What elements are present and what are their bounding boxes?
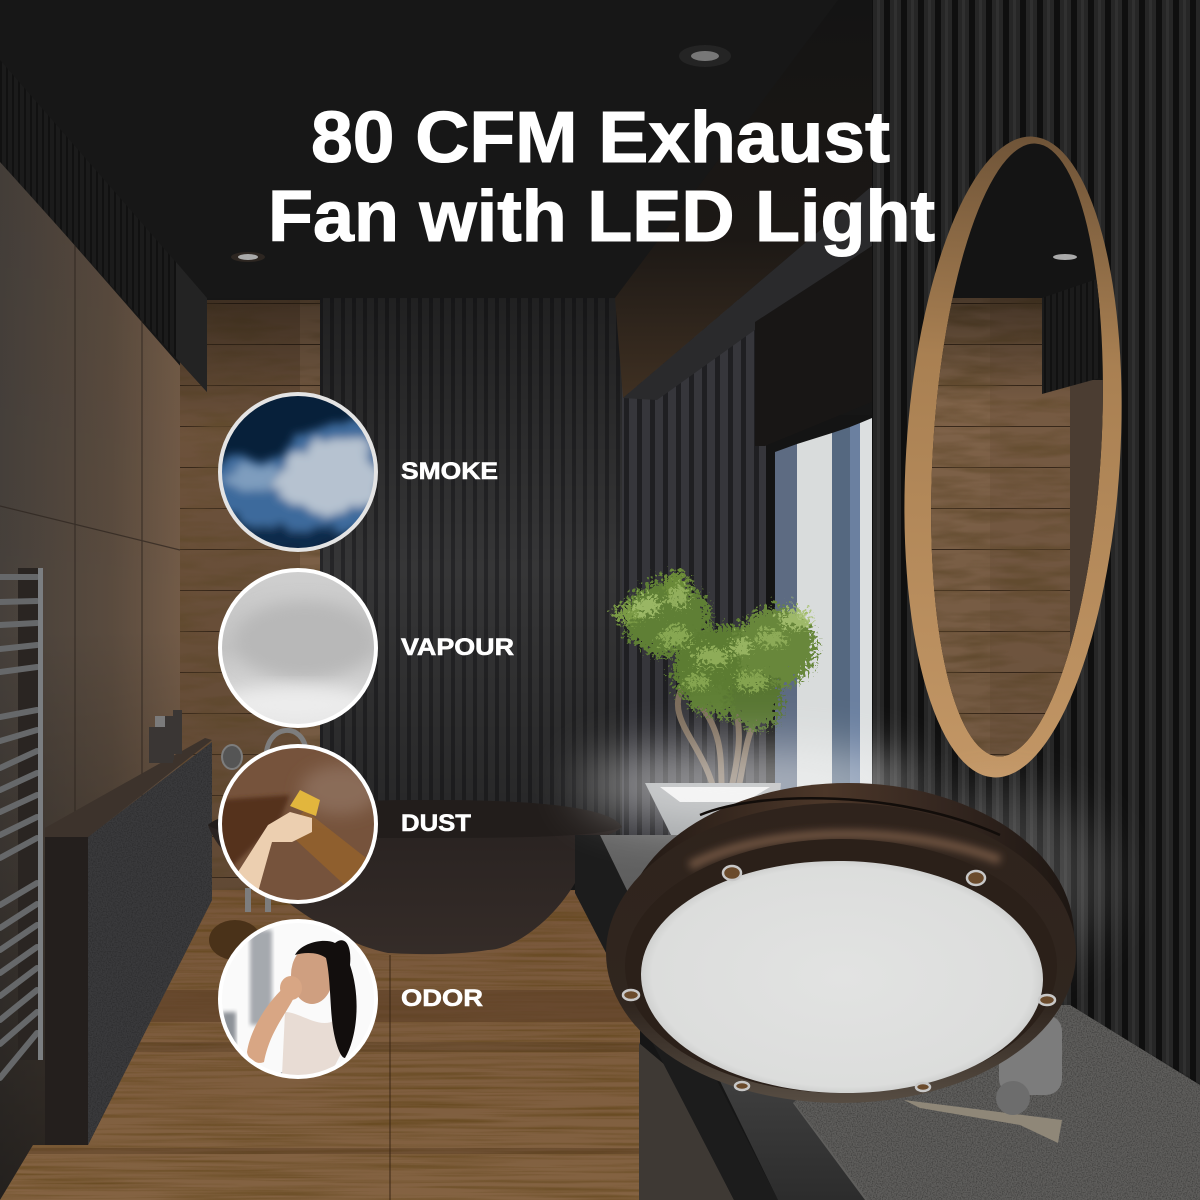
fan inner ring — [625, 839, 1057, 1093]
fan lens — [639, 858, 1045, 1096]
label: vapour: VAPOUR — [401, 634, 514, 661]
counter black edge — [575, 835, 778, 1200]
right counter — [575, 835, 1200, 1200]
counter base — [639, 1043, 734, 1200]
counter gray band — [600, 835, 865, 1200]
label: smoke: SMOKE — [401, 458, 498, 485]
item: vapour — [218, 568, 514, 728]
copper highlight — [690, 834, 1000, 866]
bottles — [149, 710, 182, 763]
beam stone strip — [623, 186, 872, 400]
plant pot — [645, 783, 781, 835]
icon: smoke circle — [210, 392, 385, 552]
title: 80 CFM Exhaust — [311, 98, 890, 178]
center ribbed wall — [320, 298, 625, 838]
icon: vapour circle — [218, 568, 378, 728]
icon: odor circle — [218, 920, 378, 1080]
right ribbed return wall — [622, 300, 772, 840]
ceiling — [0, 0, 838, 298]
mirror — [904, 136, 1122, 778]
floor — [0, 885, 650, 1200]
mirror reflection — [931, 144, 1103, 756]
left counter top — [45, 738, 212, 837]
left counter side — [88, 742, 212, 1145]
fan housing ring — [606, 803, 1076, 1103]
faucet and shower — [222, 730, 306, 912]
item: smoke — [210, 392, 498, 552]
window — [766, 415, 874, 815]
right ribbed wall — [872, 0, 1200, 1085]
left counter — [45, 738, 212, 1145]
ceiling beam — [615, 0, 872, 398]
light haze around fan — [580, 749, 1110, 970]
bathtub — [208, 800, 622, 954]
left soffit — [0, 60, 207, 392]
item: odor — [218, 920, 483, 1080]
mirror frame — [887, 130, 1139, 784]
item: dust — [218, 744, 471, 904]
left counter end — [45, 837, 88, 1145]
fan back cap — [622, 783, 1074, 1087]
ceiling downlights — [231, 45, 731, 262]
fan screws — [623, 866, 1055, 1091]
wood back wall — [180, 300, 322, 900]
label: dust: DUST — [401, 810, 471, 837]
carpet top — [793, 1005, 1200, 1200]
dark block over window — [755, 246, 872, 446]
plant — [608, 564, 810, 835]
fan slot — [700, 798, 1000, 835]
radiator — [0, 568, 43, 1078]
title — [268, 98, 935, 257]
left wall panels — [0, 160, 203, 1200]
product: exhaust fan — [606, 783, 1076, 1143]
icon: dust circle — [218, 744, 380, 904]
label: odor: ODOR — [401, 985, 483, 1012]
mount bracket — [904, 1015, 1062, 1143]
title: Fan with LED Light — [268, 177, 935, 257]
